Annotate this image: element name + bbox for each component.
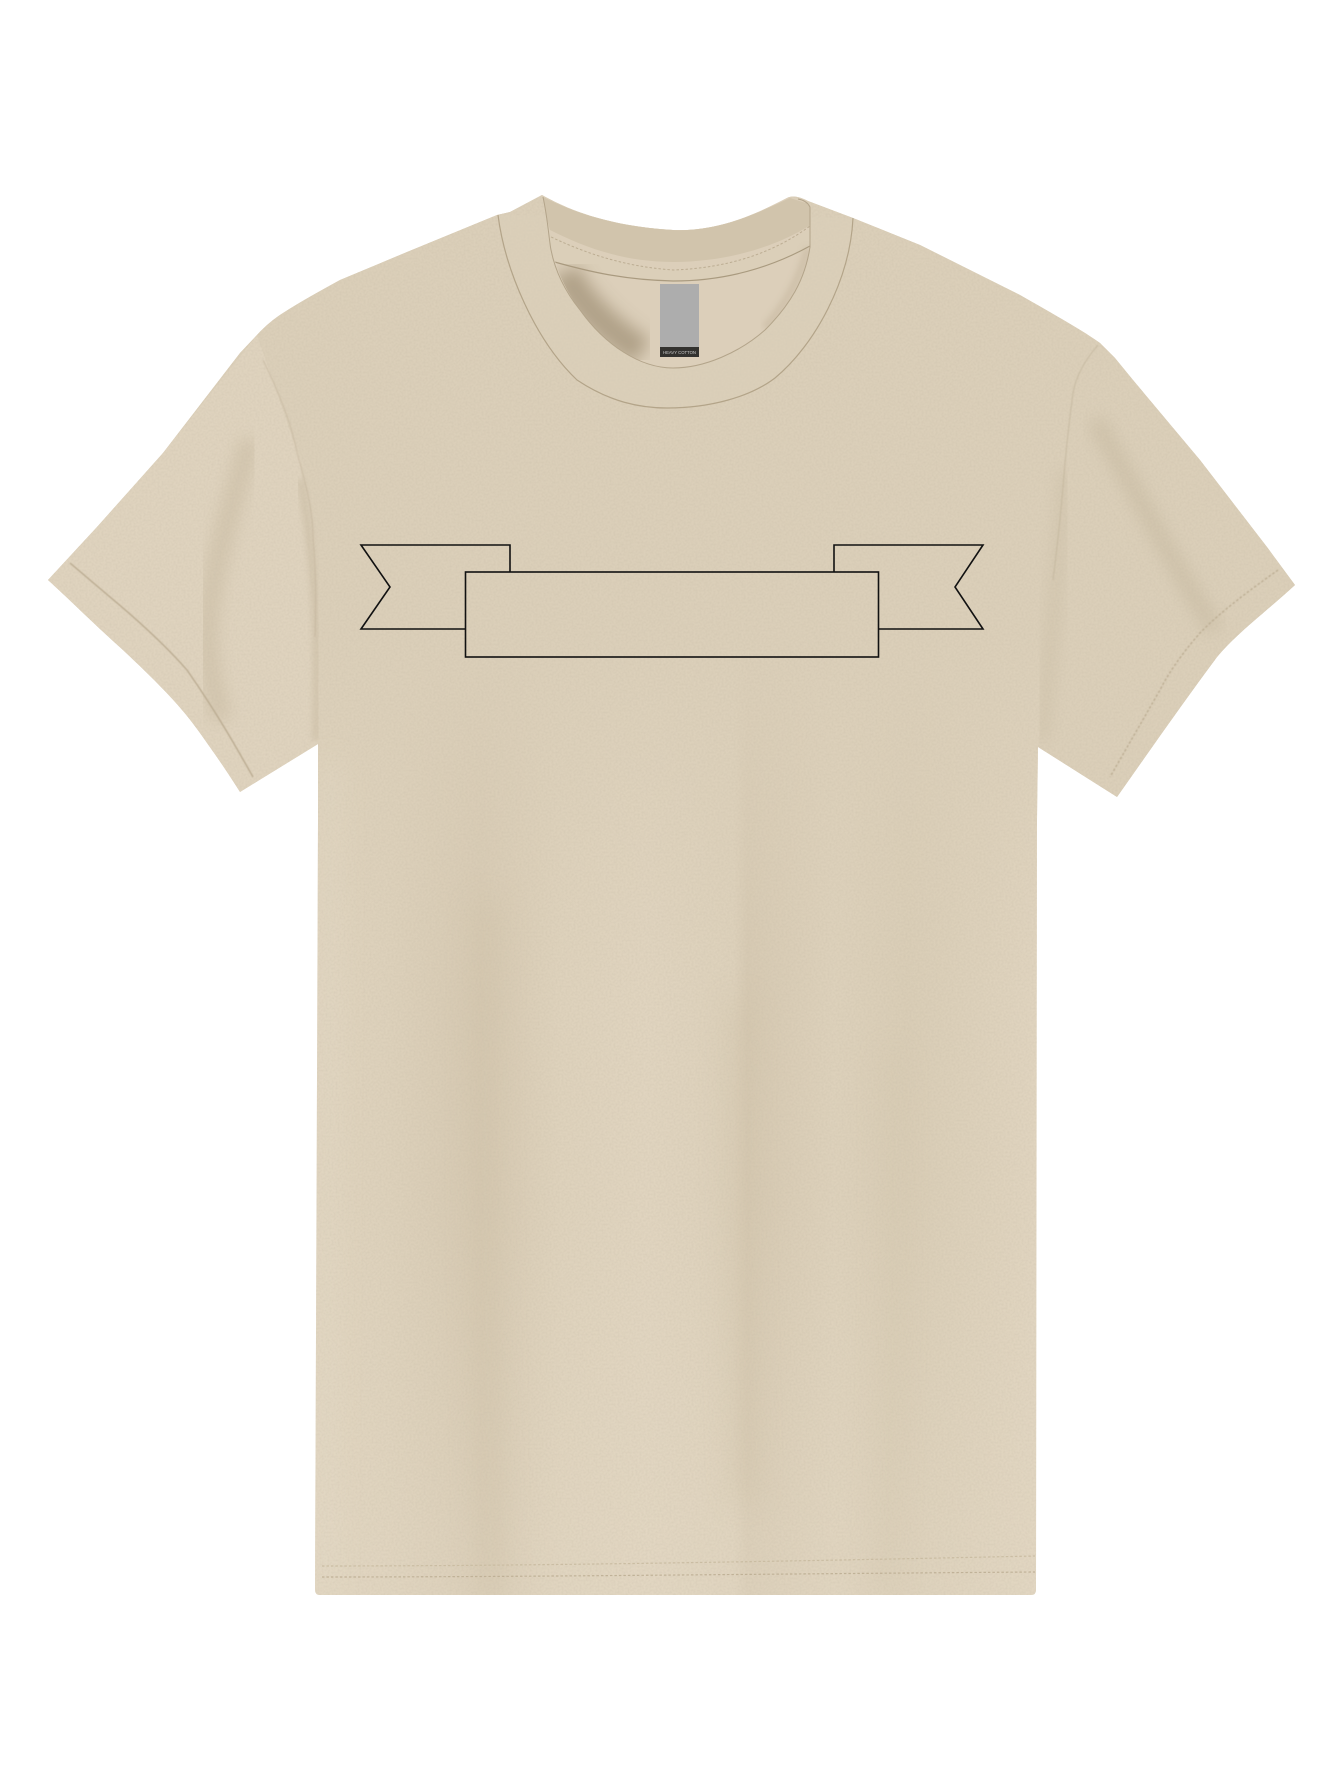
right sleeve shading: [1042, 425, 1294, 796]
t-shirt body: [48, 195, 1295, 1595]
hem stitching: [322, 1556, 1035, 1577]
label: black strip text: HEAVY COTTON: [663, 350, 696, 355]
central banner panel: [466, 572, 878, 657]
neck opening: inside back of the shirt: [540, 195, 812, 368]
ribbon banner outline: [361, 545, 983, 657]
back collar band: [540, 195, 812, 262]
fabric base with vertical folds: [48, 195, 1295, 1595]
back collar rib: [545, 228, 812, 282]
neck label: [660, 284, 699, 357]
left sleeve shading: [124, 457, 318, 790]
label: grey tag: [660, 284, 699, 347]
left ribbon tail: [361, 545, 510, 629]
sleeve hem stitching: [70, 563, 1278, 777]
vertical body folds: [325, 760, 893, 1600]
collar: front ribbed band seam: [498, 215, 853, 408]
seam line: [551, 246, 810, 281]
shoulder seams: [263, 345, 1098, 637]
t-shirt mockup illustration: [48, 195, 1295, 1595]
right ribbon tail: [834, 545, 983, 629]
shadow inside neck: [565, 272, 642, 352]
